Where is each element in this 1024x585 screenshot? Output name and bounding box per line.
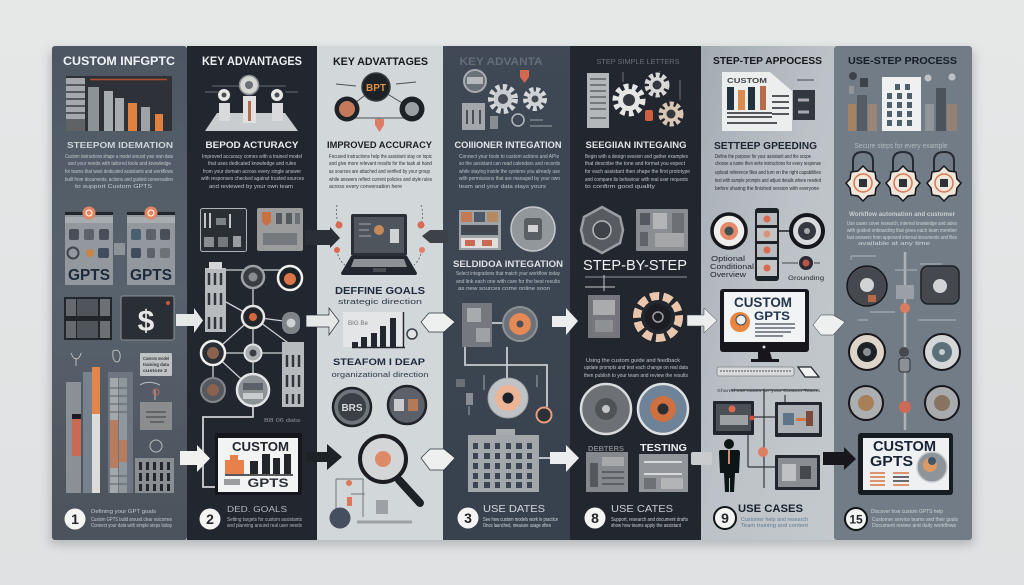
step note: Team training and content [741,523,809,529]
step note: show how teams apply the assistant [611,523,682,529]
text block: with guided onboarding that gives each team member [846,228,957,234]
subheading: BEPOD ACTURACY [206,140,298,150]
GPTS app card one [65,206,113,285]
arrow: panel 6 to 7 upper [813,315,845,335]
icon: pin with label [782,256,824,282]
text block: and link each one with care for the best results [456,279,560,285]
step note: USE CATES [611,504,673,515]
text block [456,271,560,292]
icon: flower wheel [637,296,679,338]
arrow: panel 2 to 3 middle [305,227,340,248]
panel background [834,46,972,540]
subheading: Workflow automation and customer [849,211,955,218]
step note: DED. GOALS [227,505,287,514]
heading: CUSTOM INFGPTC [63,54,175,68]
text block: before sharing the finished version with everyone [715,186,819,192]
orange node [758,447,768,457]
panel: common integration [443,46,570,540]
arrow: panel 5 to 6 upper [687,308,717,333]
text block: to confirm good quality [585,184,655,190]
arrow: panel 5 to 6 lower [691,452,712,465]
icon cluster: dials and line [847,252,960,430]
text block: that uses dedicated knowledge and rules [208,161,296,167]
text line [585,275,687,291]
tile: video [713,401,754,435]
heading: STEP-TEP APPOCESS [713,55,822,67]
arrow: panel 6 to 7 lower [823,447,856,470]
label card: Custom model [143,356,169,361]
step note: Support, research and document drafts [611,517,688,523]
heading: KEY ADVANTA [460,56,543,68]
small connector box [114,243,125,255]
text block: Use cases cover research, internal knowledge and sales [847,221,957,227]
infographic board [52,46,972,540]
icon: gears and badge [462,70,552,130]
step badge 15 [845,508,867,530]
step badge 1 [64,508,86,530]
panel background [701,46,834,540]
step note [738,503,809,529]
step badge 2: 2 [206,511,214,527]
text block: built from documents, actions and guided conversation [65,177,173,183]
subheading: STEEPOM IDEMATION [67,140,173,150]
small labels: Shared use cases for your Custom Teams [717,388,821,393]
heading: KEY ADVATTAGES [333,56,428,68]
custom GPTS card: CUSTOM [873,439,936,455]
text block: with responses checked against trusted sources [200,176,304,182]
text block: for each assistant then shape the first prototype [585,169,690,175]
icon: magnifier [360,436,420,503]
text block: Improved accuracy comes with a trained model [202,154,302,160]
icon: report document [722,72,815,131]
text block: that describe the tone and format you expect [585,161,685,167]
text block: while staying inside the systems you already use [458,169,560,175]
text block: choose a name then write instructions for every response [715,161,821,167]
arrow: panel 4 to 5 upper [552,308,578,335]
testing card left [586,452,628,492]
icon: connected nodes [334,73,424,132]
heading: KEY ADVANTAGES [202,56,302,68]
arrow: panel 1 to 2 lower [180,445,210,472]
step note [871,509,958,529]
text block: and compare its behaviour with real user requests [585,177,688,183]
panel: step approach light [701,46,834,540]
label card: training data [143,362,169,367]
step note: Customer service teams and their goals [872,517,958,523]
text block [328,154,432,190]
icon: dollar card: $ [138,305,155,338]
network diagram [201,262,304,487]
step badge 1: 1 [71,511,79,527]
GPTS app card two [127,206,175,285]
icon: podium figures [205,76,298,131]
step note: Discover how custom GPTS help [871,509,943,515]
step note: Customer help and research [741,517,808,523]
subheading: SETTEEP GPEEDING [714,141,817,152]
calendar [468,429,552,492]
icon: target left [712,214,746,248]
text block [584,358,689,379]
step note: Once launched, measure usage often [483,523,551,529]
icon: orange dial [638,384,688,434]
icon: lock badge three [927,152,961,201]
icon: keyboard and pad [717,367,819,377]
heading: USE-STEP PROCESS [848,55,957,67]
arrow: panel 3 to 4 lower [421,449,455,470]
icon: dial: BRS [341,403,363,414]
tool card [459,210,501,250]
tall stacked bars [66,367,133,493]
panel background [570,46,701,540]
step note [611,504,688,529]
label: DEBTERS [588,444,624,453]
text block: Using the custom guide and feedback [586,358,680,364]
icon: building [135,458,174,493]
arrow: panel 2 to 3 lower [306,444,342,470]
step note [227,505,302,529]
text block: Connect your tools to custom actions and APIs [459,154,559,160]
text block: available at any time [858,241,930,247]
text block [458,154,560,190]
arrow: panel 3 to 4 goals [421,313,455,332]
step note: Document review and daily workflows [872,523,956,529]
step badge 15: 15 [849,512,863,526]
subheading: COIIIONER INTEGATION [454,140,562,150]
board shadow [50,50,974,545]
icon: person [719,439,740,492]
text line: Secure steps for every example [854,143,948,150]
testing card right [639,454,688,492]
text block: test with sample prompts and adjust details where needed [715,178,821,184]
step badge 2 [200,508,220,530]
step badge 8: 8 [591,510,599,526]
org chart lines [731,390,818,488]
caption: Optional [711,256,746,263]
heading: step by step: STEP-BY-STEP [583,257,687,274]
custom GPTS card: GPTS [870,454,913,470]
custom GPTS card: GPTS [248,476,288,490]
icon: pin with label: Grounding [788,276,824,282]
panel background [52,46,187,540]
panel background [443,46,570,540]
subheading: strategic direction [338,297,422,306]
process flow diagram [456,303,552,422]
icon: gauge [388,386,426,424]
subheading: STEAFOM I DEAP [333,357,426,368]
step note: USE CASES [738,503,803,515]
text block: Custom instructions shape a model around your own data [65,154,174,160]
caption [710,256,755,279]
icon: dollar card [121,296,174,340]
media card [636,209,688,251]
icon: target right [779,215,823,247]
icon: city skyline [848,72,957,131]
GPTS app card one: GPTS [68,267,110,284]
icon: hex gear [581,207,623,253]
step note: Connect your data with simple steps today [91,523,172,529]
icon: connected nodes: BPT [366,83,386,94]
text block [585,154,690,190]
subheading: SEEGIIAN INTEGAING [586,140,686,150]
process tiles [588,295,620,338]
dashboard card light [257,208,303,251]
icon: laptop [334,205,425,275]
text block: Select integrations that match your workflow today [456,271,560,277]
subheading: IMPROVED ACCURACY [327,140,433,151]
step badge 9 [714,507,736,529]
panel: key advantages light [317,46,443,540]
text block: and reviewed by your own team [209,184,293,190]
icon grid [64,297,112,340]
network diagram: BB 06 data [264,418,300,424]
label card: custom 2 [143,368,168,373]
text block: for teams that want dedicated assistants and workflows [65,169,173,175]
red node [750,416,754,420]
bottom diagram sketch [330,479,412,528]
step note: See how custom models work in practice [483,517,558,523]
step badge 9: 9 [721,510,729,526]
label card [140,353,172,376]
step note: Defining your GPT goals [91,509,157,515]
text block: and give more relevant results for the task at hand [329,161,432,167]
tile: chart [775,402,822,437]
small scribble icons [71,350,162,452]
step note [483,504,558,529]
text block: so the assistant can read calendars and records [459,161,560,167]
text block: to support Custom GPTS [75,184,152,190]
text block: Begin with a design session and gather examples [585,154,688,160]
step badge 3: 3 [464,510,472,526]
panel background [187,46,317,540]
custom GPTS card: CUSTOM [232,439,289,454]
icon: report document: CUSTOM [727,78,767,85]
text block: across every conversation here [329,184,402,190]
text block: as new sources come online soon [458,286,550,292]
text block: from your domain across every single answer [203,169,301,175]
heading: STEP SIMPLE LETTERS [596,57,680,66]
panel: step by step dark [570,46,701,540]
icon: grey dial [581,384,631,434]
bar chart: BIG Be [348,320,368,327]
GPTS app card two: GPTS [130,267,172,284]
text block: update prompts and test each change on real data [584,365,689,371]
text block: as sources are attached and verified by your group [329,169,430,175]
tile: lock [775,455,820,490]
text block: while answers reflect current policies and style rules [328,177,432,183]
panel: key advantages dark [187,46,317,540]
heading: defining goals: DEFFINE GOALS [335,285,425,297]
icon: lock dial [511,207,555,251]
arrow: panel 3 to 4 top [422,230,448,243]
step note: Setting targets for custom assistants [227,517,302,523]
text block: and your needs with tailored tools and knowledge [68,161,171,167]
icon: dial [333,388,371,426]
arrow: panel 1 to 2 upper [176,308,203,333]
text block: with permissions that are managed by your own [458,176,560,182]
heading: testing: TESTING [640,443,687,454]
icon: lock badge two [886,152,920,201]
caption: Overview [710,272,747,279]
text block: fast answers from approved internal documents and files [847,235,957,241]
icon: desktop monitor: CUSTOM [734,295,792,310]
icon: desktop monitor [720,289,809,362]
step note [91,509,172,529]
subheading: SELDIDOA INTEGATION [453,259,563,270]
dashboard card dark [200,208,246,252]
grey note card [140,402,172,430]
step badge 8 [584,508,606,528]
text block [715,154,821,192]
text block [846,221,957,247]
icon: gears and list [587,71,681,128]
text block [65,154,174,190]
custom GPTS card [215,433,302,495]
text block: Define the purpose for your assistant and the scope [715,154,811,160]
arrow: panel 4 to 5 lower [550,445,579,472]
icon: phone [755,208,779,281]
icon: lock badge one [846,152,880,201]
text block: then publish to your team and review the results [584,373,688,379]
panel: use step process [834,46,972,540]
caption: Conditional [710,264,755,271]
step badge 3 [458,508,478,528]
text block [200,154,304,190]
arrow: panel 2 to 3 goals [306,308,339,335]
step note: and planning around real user needs [227,523,302,529]
icon: desktop monitor: GPTS [754,309,790,323]
panel: custom info [52,46,187,540]
custom GPTS card [858,433,953,495]
step note: USE DATES [483,504,545,515]
panel background [317,46,443,540]
bar chart [343,312,417,348]
text block: upload reference files and turn on the right capabilities [715,170,821,176]
text block: Focused instructions help the assistant stay on topic [329,154,432,160]
text block: team and your data stays yours [459,184,546,190]
bar chart [66,76,172,131]
step note: Custom GPTS build around clear outcomes [91,517,172,523]
arrows between panels [176,227,856,472]
text line: organizational direction [332,370,428,379]
